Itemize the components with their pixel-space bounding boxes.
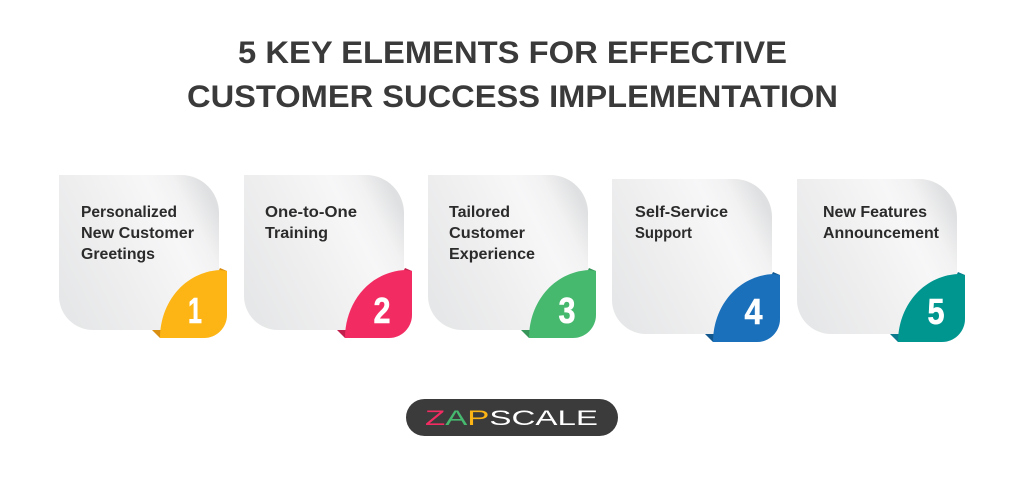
card 5 label: Announcement	[823, 225, 939, 242]
card 2 label: One-to-One	[265, 204, 357, 221]
card 3 label: Experience	[449, 246, 535, 263]
card 3 label: Tailored	[449, 204, 510, 221]
panel: card 2	[244, 175, 412, 338]
card 4 badge: 4	[744, 291, 762, 332]
card 3 label	[449, 204, 535, 263]
title	[187, 34, 838, 114]
card 3 badge: 3	[558, 290, 576, 331]
panel: card 3	[428, 175, 596, 338]
logo: zapscale	[406, 399, 618, 436]
panel: card 5	[797, 179, 965, 342]
card 1 label: New Customer	[81, 225, 194, 242]
logo: zapscale: Z A P SCALE	[425, 407, 598, 430]
card 2 label	[265, 204, 357, 242]
card 3 badge	[521, 268, 596, 338]
card 1 badge: 1	[188, 290, 202, 331]
card 5 label	[823, 204, 939, 242]
card 2 label: Training	[265, 225, 328, 242]
panel: card 1	[59, 175, 227, 338]
title: 5 KEY ELEMENTS FOR EFFECTIVE	[238, 34, 787, 70]
card 5 badge: 5	[928, 291, 944, 332]
panel: card 4	[612, 179, 780, 342]
card 4 label: Self-Service	[635, 204, 728, 221]
card 1 label: Personalized	[81, 204, 177, 221]
card 2 badge	[337, 268, 412, 338]
card 2 badge: 2	[374, 290, 390, 331]
card 1 label: Greetings	[81, 246, 155, 263]
title: CUSTOMER SUCCESS IMPLEMENTATION	[187, 78, 838, 114]
card 5 label: New Features	[823, 204, 927, 221]
card 4 badge	[705, 272, 780, 342]
card 5 badge	[890, 272, 965, 342]
card 4 label	[635, 204, 728, 242]
card 3 label: Customer	[449, 225, 525, 242]
card 1 badge	[152, 268, 227, 338]
card 4 label: Support	[635, 225, 692, 242]
card 1 label	[81, 204, 194, 263]
